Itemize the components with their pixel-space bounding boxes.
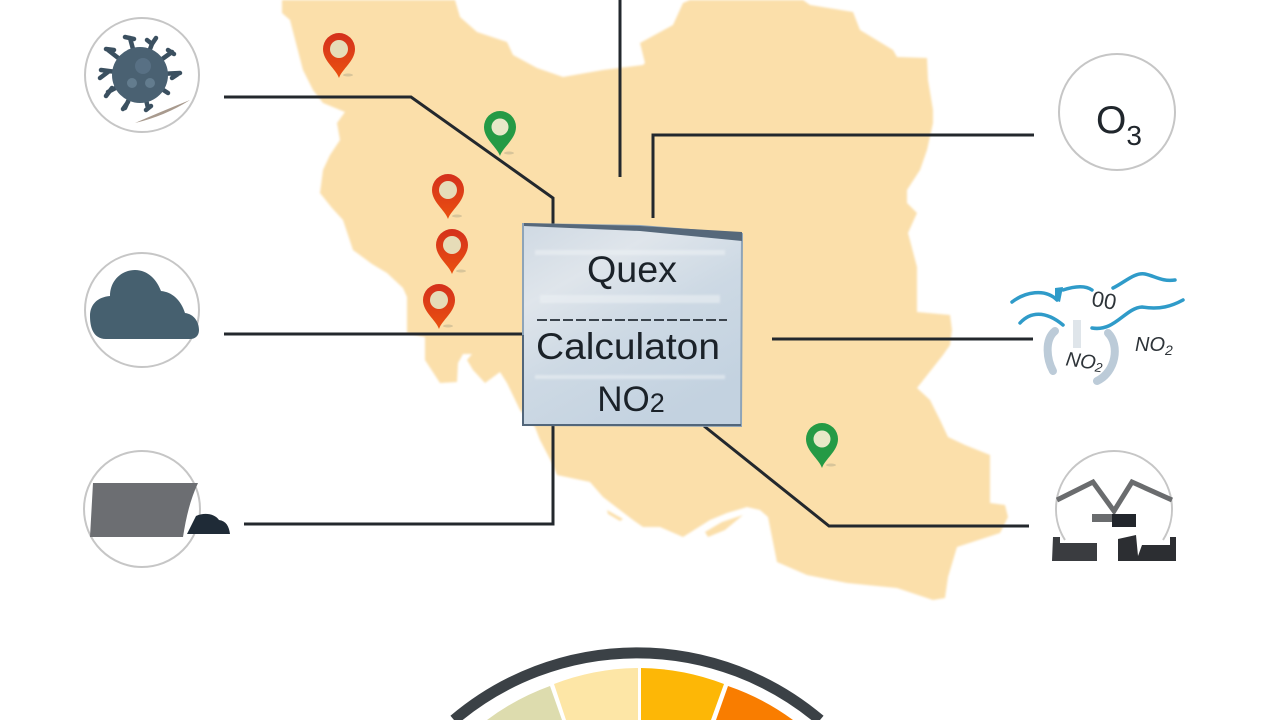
connector: top to panel: [618, 0, 622, 177]
smoke shape: [187, 514, 230, 534]
icon: cloud: [85, 253, 199, 367]
roof: [1057, 482, 1172, 511]
pin: west red 2: [436, 229, 468, 274]
connector: building to panel: [704, 426, 1029, 526]
label: 00: 00: [1090, 286, 1118, 315]
gauge segment: green: [487, 686, 562, 720]
label: NO2 right: NO: [1135, 334, 1165, 356]
islands: [607, 510, 623, 521]
icon: O3: 3: [1126, 120, 1142, 151]
label: NO2 centre: 2: [1093, 359, 1104, 376]
central panel: calculation: [523, 223, 742, 426]
connector: NO2 to panel: [772, 338, 1033, 340]
connector lines: [224, 0, 1034, 526]
pin: north-west red: [323, 33, 355, 78]
panel text: NO2: NO: [597, 380, 650, 419]
panel heading: Quex: [587, 249, 678, 290]
icon: O3: [1059, 54, 1175, 170]
icon: building: [1052, 451, 1176, 561]
pin: north green: [484, 111, 516, 156]
molecule arcs: [1048, 331, 1115, 381]
centre column: [1073, 320, 1081, 348]
pin: south-east green: [806, 423, 838, 468]
icon: NO2 waves: [1012, 274, 1183, 381]
connector: cloud to panel: [224, 332, 524, 336]
map of country: [282, 0, 1008, 600]
icon: O3: O: [1096, 99, 1126, 142]
panel divider: [537, 319, 727, 321]
gauge segment: light yellow: [554, 668, 638, 720]
panel top edge: [524, 223, 742, 241]
connector: factory to panel: [244, 424, 553, 524]
label: NO2 centre: NO: [1064, 348, 1097, 374]
panel text: calculation: Calculaton: [536, 326, 720, 367]
connector: virus to panel: [224, 97, 553, 225]
connector: O3 to panel: [653, 135, 1034, 218]
panel shading streaks: [535, 250, 725, 379]
gauge segment: amber: [641, 668, 724, 720]
base right: [1118, 535, 1176, 561]
pin: west red 1: [432, 174, 464, 219]
icon: factory block: [84, 451, 230, 567]
location pins: [323, 33, 838, 468]
gauge: [454, 653, 820, 720]
pin: west red 3: [423, 284, 455, 329]
virus streak: [135, 100, 190, 123]
base left: [1052, 537, 1097, 561]
waves: [1012, 274, 1183, 328]
icon: virus: [85, 18, 199, 132]
gauge segment: orange: [716, 686, 793, 720]
blue wave blob: [1055, 287, 1063, 302]
central bar: [1092, 514, 1114, 522]
label: NO2 right: 2: [1164, 342, 1173, 358]
panel text: NO2: 2: [650, 388, 665, 418]
panel left edge: [523, 335, 741, 425]
gauge outer ring: [454, 653, 820, 720]
